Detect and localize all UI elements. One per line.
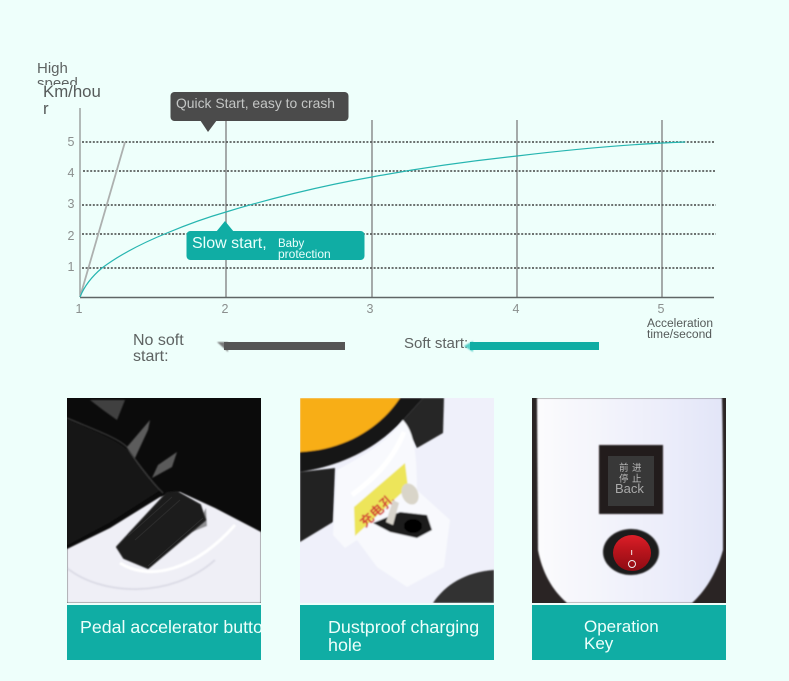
switch labels: 停	[619, 473, 629, 485]
callout: slow start	[186, 221, 364, 261]
panel: charging hole	[300, 398, 494, 660]
caption: hole	[328, 635, 362, 655]
caption bar	[300, 605, 494, 660]
panel: pedal accelerator	[67, 398, 273, 660]
caption: Key	[584, 634, 614, 653]
caption: Pedal accelerator button	[80, 617, 273, 637]
y axis labels: 2	[68, 229, 75, 243]
panel: operation key	[532, 398, 726, 660]
photo: switches	[532, 398, 726, 603]
x axis title: time/second	[647, 329, 712, 341]
y axis labels	[68, 135, 75, 274]
axis unit: Km/hour: Km/hou	[43, 82, 101, 101]
caption	[328, 617, 479, 655]
caption bar	[532, 605, 726, 660]
axis title: high speed: High	[37, 60, 68, 77]
line chart	[68, 108, 716, 341]
x axis title	[647, 318, 713, 341]
y axis labels: 3	[68, 197, 75, 211]
legend: soft start	[404, 335, 599, 352]
legend: soft start: Soft start:	[404, 335, 468, 352]
y axis labels: 5	[68, 135, 75, 149]
vertical grid lines	[226, 120, 662, 297]
switch labels: 前	[619, 462, 629, 474]
axes	[80, 108, 714, 298]
legend: no soft start: start:	[133, 348, 169, 365]
legend: no soft start	[133, 332, 345, 365]
y axis labels: 1	[68, 260, 75, 274]
switch labels	[616, 462, 644, 493]
y axis labels: 4	[68, 166, 75, 180]
x axis labels: 1	[76, 302, 83, 316]
caption: Dustproof charging	[328, 617, 479, 637]
legend: no soft start: No soft	[133, 332, 184, 349]
switch labels: 进	[632, 463, 642, 474]
quick start line	[80, 142, 125, 297]
axis title: high speed	[38, 62, 77, 85]
x axis labels: 4	[513, 302, 520, 316]
callout: slow start: Slow start,	[192, 235, 267, 252]
x axis labels: 3	[367, 302, 374, 316]
caption: Operation	[584, 617, 659, 636]
slow start curve	[80, 142, 685, 297]
x axis labels: 5	[658, 302, 665, 316]
axis unit: Km/hour	[43, 82, 101, 118]
caption bar	[67, 605, 261, 660]
x axis labels: 2	[222, 302, 229, 316]
photo: charging port	[300, 398, 494, 603]
callout: quick start: Quick Start, easy to crash	[176, 95, 335, 111]
caption	[584, 617, 659, 653]
photo: charging port: 充电孔	[356, 491, 397, 530]
photo: pedal	[67, 398, 261, 603]
switch labels: 止	[632, 473, 642, 485]
switch labels: Back	[615, 481, 644, 496]
axis title: high speed: speed	[37, 75, 78, 92]
callout: quick start	[170, 92, 348, 132]
callout: slow start: protection	[278, 247, 331, 261]
callout: slow start: Baby	[278, 238, 304, 250]
axis unit: Km/hour: r	[43, 99, 49, 118]
x axis labels	[76, 302, 665, 316]
x axis title: Acceleration	[647, 318, 713, 330]
